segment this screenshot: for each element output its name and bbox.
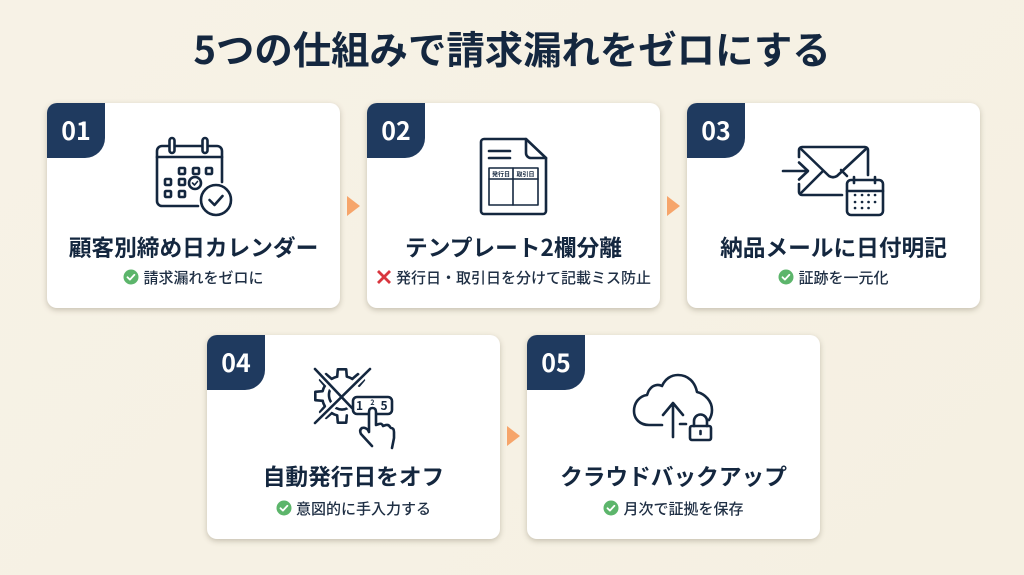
card heading: 顧客別締め日カレンダー — [69, 230, 318, 263]
icon: red cross — [377, 270, 391, 284]
panel: card 02 template — [367, 103, 660, 308]
badge 05: 05 — [541, 344, 571, 380]
panel: card 01 calendar — [47, 103, 340, 308]
icon: green check — [124, 270, 138, 284]
badge 02 — [367, 103, 425, 158]
icon: cloud upload with lock — [632, 374, 714, 442]
arrow 2 to 3 — [667, 196, 680, 216]
arrow 4 to 5 — [507, 426, 520, 446]
card heading: テンプレート2欄分離 — [405, 230, 622, 263]
card note: 証跡を一元化 — [798, 266, 888, 288]
badge 03: 03 — [701, 112, 731, 148]
icon: green check — [604, 500, 618, 516]
card heading: クラウドバックアップ — [560, 459, 787, 492]
icon: green check — [276, 500, 292, 516]
badge 05 — [527, 335, 585, 390]
title: 5つの仕組みで請求漏れをゼロにする — [193, 20, 831, 76]
card note: 意図的に手入力する — [296, 498, 431, 518]
badge 02: 02 — [381, 112, 411, 148]
badge 03 — [687, 103, 745, 158]
card note: 月次で証拠を保存 — [623, 498, 744, 518]
icon: document with two-column table: 発行日 — [492, 170, 510, 178]
icon: crossed gear with keypad and hand — [314, 368, 396, 450]
icon: crossed gear with keypad and hand: 1 — [356, 397, 363, 414]
panel: card 03 email — [687, 103, 980, 308]
badge 01 — [47, 103, 105, 158]
icon: envelope with arrow and calendar — [782, 146, 884, 216]
icon: green check — [778, 270, 794, 284]
icon: crossed gear with keypad and hand: 5 — [380, 397, 388, 414]
badge 01: 01 — [61, 112, 91, 148]
panel: card 04 auto date off — [207, 335, 500, 539]
icon: document with two-column table — [480, 138, 548, 216]
panel: card 05 cloud backup — [527, 335, 820, 539]
arrow 1 to 2 — [347, 196, 360, 216]
icon: document with two-column table: 取引日 — [516, 170, 535, 178]
card note: 請求漏れをゼロに — [143, 266, 264, 288]
card heading: 納品メールに日付明記 — [720, 230, 947, 263]
card heading: 自動発行日をオフ — [263, 459, 444, 492]
icon: calendar with check — [156, 136, 232, 216]
card note: 発行日・取引日を分けて記載ミス防止 — [396, 266, 651, 288]
badge 04 — [207, 335, 265, 390]
icon: crossed gear with keypad and hand: 2 — [370, 398, 375, 408]
badge 04: 04 — [221, 344, 251, 380]
